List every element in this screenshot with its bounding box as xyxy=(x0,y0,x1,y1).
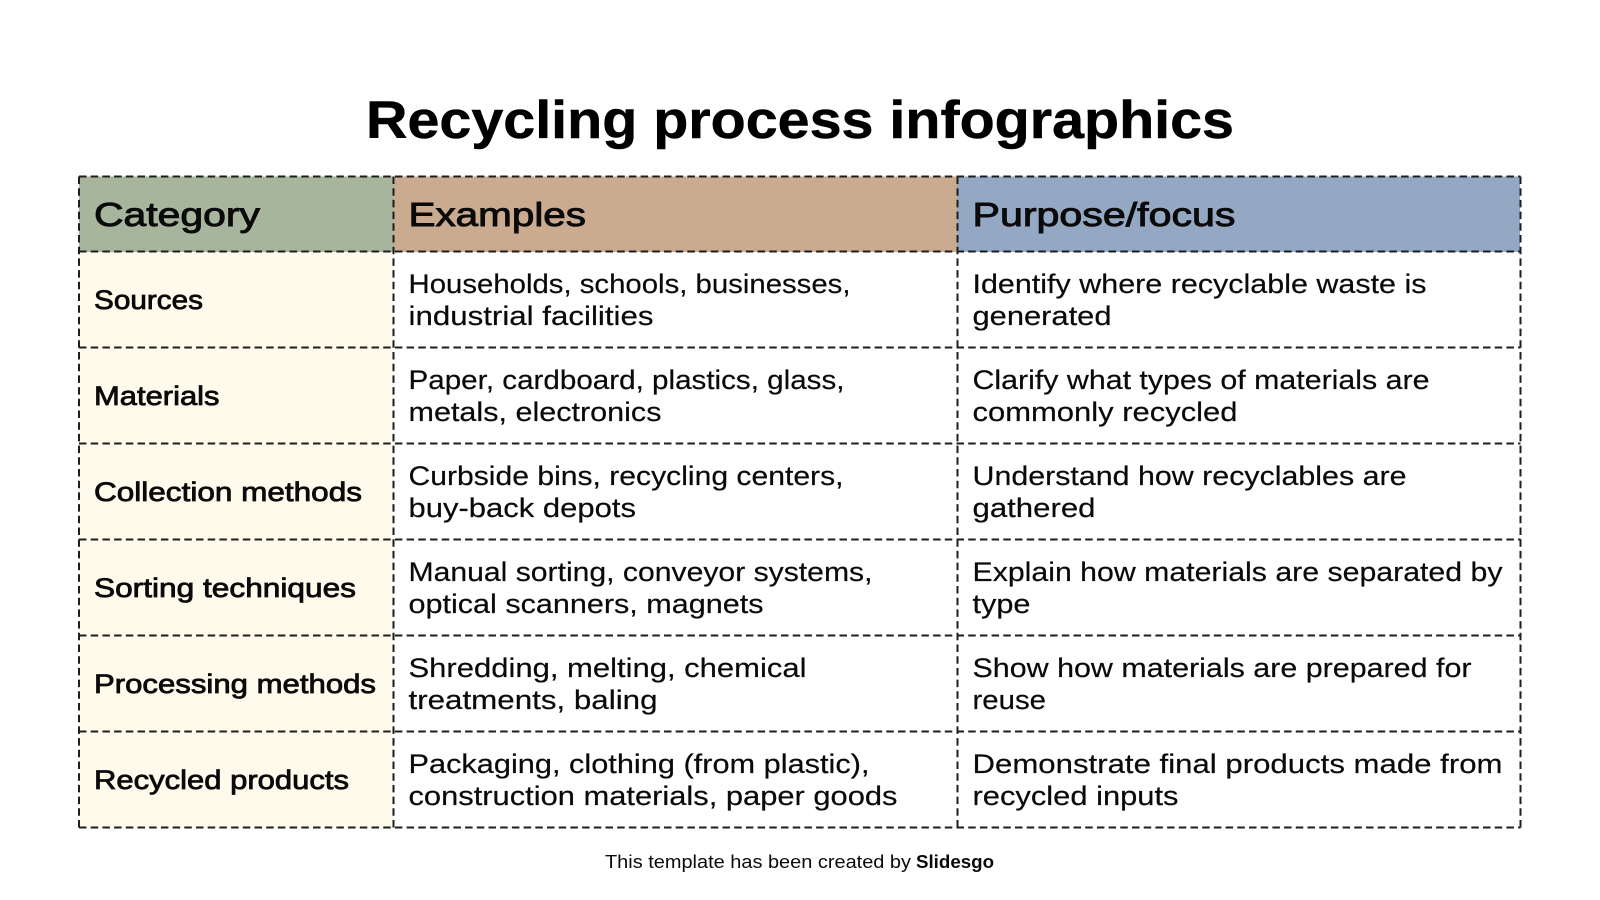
row: materials: commonly recycled xyxy=(972,397,1238,427)
row: sorting techniques: type xyxy=(972,589,1030,619)
row: processing methods: Show how materials are prepared for xyxy=(972,653,1472,683)
row: recycled products: construction materials, paper goods xyxy=(408,781,898,811)
row: sources: Sources xyxy=(94,285,203,315)
row: sources: Households, schools, businesses, xyxy=(408,269,850,299)
row: sorting techniques: Explain how materials are separated by xyxy=(972,557,1503,587)
footer credit: Slidesgo xyxy=(916,852,994,872)
row: collection methods xyxy=(94,461,1406,523)
row: sorting techniques xyxy=(94,557,1503,619)
row: recycled products: recycled inputs xyxy=(972,781,1178,811)
row: sources xyxy=(94,269,1426,331)
row: processing methods: Shredding, melting, chemical xyxy=(408,653,806,683)
row: collection methods: Curbside bins, recycling centers, xyxy=(408,461,844,491)
row: materials xyxy=(94,365,1430,427)
row: sorting techniques: Manual sorting, conveyor systems, xyxy=(408,557,872,587)
row: recycled products: Recycled products xyxy=(94,765,349,795)
table xyxy=(79,176,1520,828)
row: sorting techniques: optical scanners, magnets xyxy=(408,589,764,619)
row: materials: metals, electronics xyxy=(408,397,662,427)
row: materials: Paper, cardboard, plastics, glass, xyxy=(408,365,844,395)
row: recycled products: Packaging, clothing (from plastic), xyxy=(408,749,870,779)
row: collection methods: Understand how recyclables are xyxy=(972,461,1406,491)
header: examples xyxy=(393,176,957,252)
category column background xyxy=(79,252,393,828)
row: recycled products xyxy=(94,749,1502,811)
header: examples: Examples xyxy=(408,196,586,233)
row: collection methods: buy-back depots xyxy=(408,493,636,523)
title: Recycling process infographics xyxy=(366,91,1234,150)
header: category xyxy=(79,176,393,252)
row: collection methods: gathered xyxy=(972,493,1096,523)
row: processing methods: reuse xyxy=(972,685,1046,715)
row: materials: Materials xyxy=(94,381,220,411)
row: sources: generated xyxy=(972,301,1112,331)
row: recycled products: Demonstrate final products made from xyxy=(972,749,1502,779)
header: purpose/focus: Purpose/focus xyxy=(972,196,1236,233)
header: category: Category xyxy=(94,196,261,233)
footer credit: This template has been created by xyxy=(605,852,911,872)
row: sorting techniques: Sorting techniques xyxy=(94,573,356,603)
row: processing methods xyxy=(94,653,1472,715)
row: processing methods: treatments, baling xyxy=(408,685,658,715)
row: materials: Clarify what types of materials are xyxy=(972,365,1430,395)
header: purpose/focus xyxy=(957,176,1520,252)
row: sources: Identify where recyclable waste is xyxy=(972,269,1426,299)
row: processing methods: Processing methods xyxy=(94,669,376,699)
row: sources: industrial facilities xyxy=(408,301,654,331)
row: collection methods: Collection methods xyxy=(94,477,362,507)
